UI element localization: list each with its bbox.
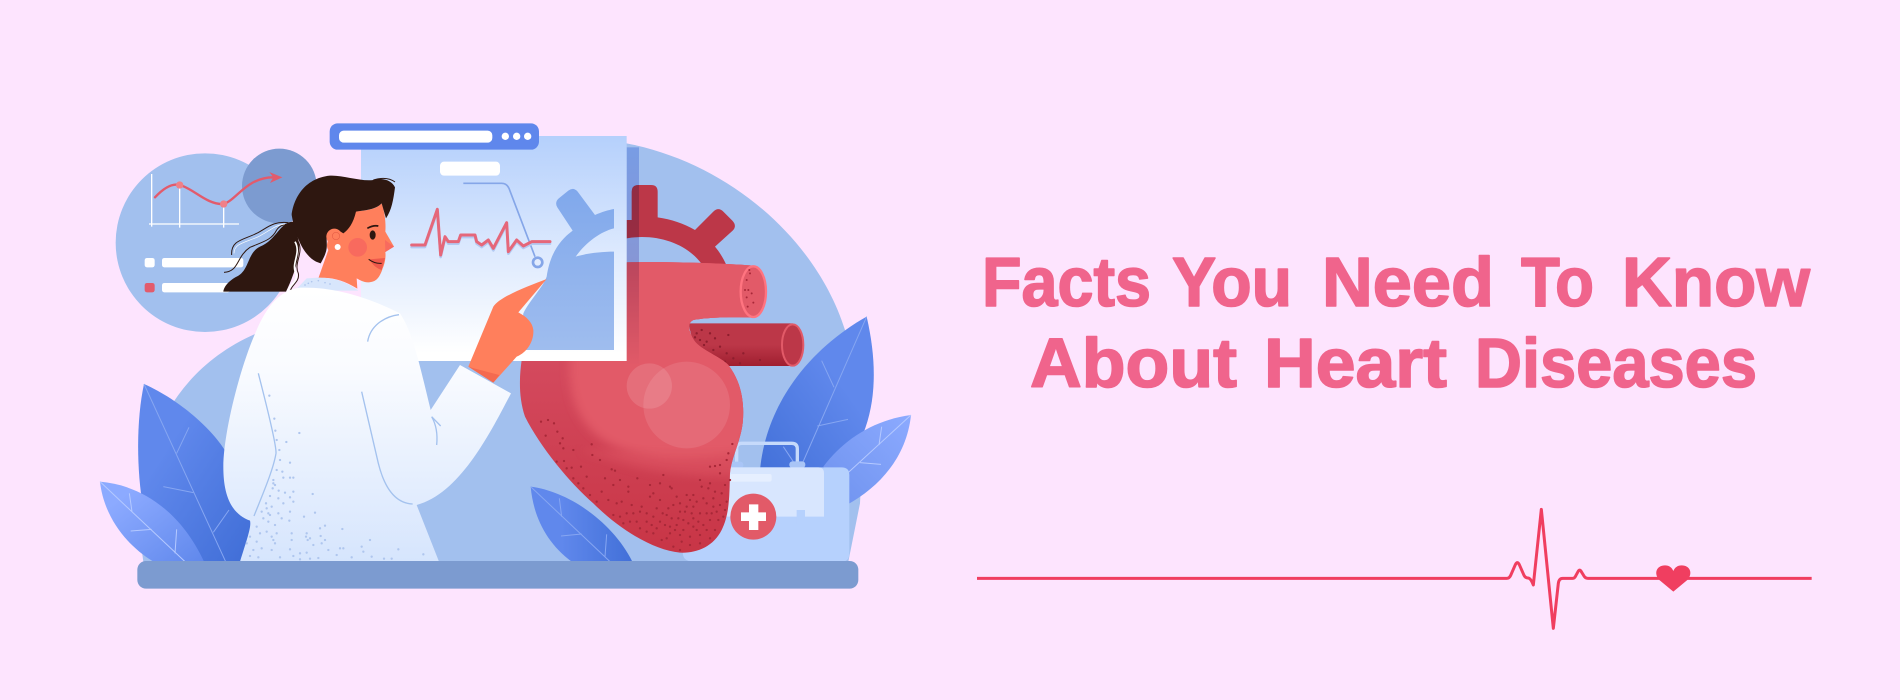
title line 2: About [1030,324,1237,402]
left big leaf [138,384,253,562]
heart icon [1656,565,1690,592]
heart speckles [541,420,732,550]
table [137,561,858,589]
heartbeat trace [977,509,1812,628]
left front leaf [100,482,204,562]
title line 2: Heart [1264,324,1447,402]
first aid kit [683,443,849,562]
callout line [463,183,542,267]
title line 1: You [1172,243,1292,321]
lab coat [223,288,511,562]
title line 1: Facts [982,243,1151,321]
line chart [149,172,282,228]
panel shadow band [627,147,639,364]
collar speckles [305,281,330,285]
doctor [223,176,547,562]
legend [145,258,243,292]
face and neck [318,203,394,289]
circle: chart backdrop [116,153,294,332]
upper artery [741,266,766,317]
heart group [513,147,911,562]
title line 1 [982,243,1811,321]
circle: small dark accent [242,149,317,223]
title line 2 [1030,324,1757,402]
title line 2: Diseases [1475,324,1757,402]
right big leaf [760,317,874,477]
coat speckles [247,396,423,559]
background blob [140,143,863,562]
title [982,243,1811,402]
ECG trace on panel [412,209,550,257]
hair strands [224,178,395,292]
browser bar [330,123,539,150]
coat seams [254,315,441,516]
aortic arch [627,185,735,266]
face details [348,226,394,270]
right small leaf [823,415,911,505]
lab coat collar [295,278,358,291]
ear and earring [326,229,342,250]
monitor panel [361,136,627,361]
infographic canvas [100,123,1812,630]
title line 1: Need [1322,243,1494,321]
head hair [292,176,395,263]
title line 1: To [1521,243,1594,321]
lower artery [688,323,803,366]
illustration: doctor with heart [100,123,911,589]
first aid cross badge [730,494,776,540]
center bottom leaf [531,487,632,562]
heart organ [513,260,780,560]
heart highlights [643,362,730,448]
ponytail [223,222,299,292]
title line 1: Know [1622,243,1811,321]
heart x-ray on panel [520,189,614,350]
panel label bar [440,162,500,176]
hand pointing [468,279,547,383]
heartbeat line with heart [977,509,1812,628]
